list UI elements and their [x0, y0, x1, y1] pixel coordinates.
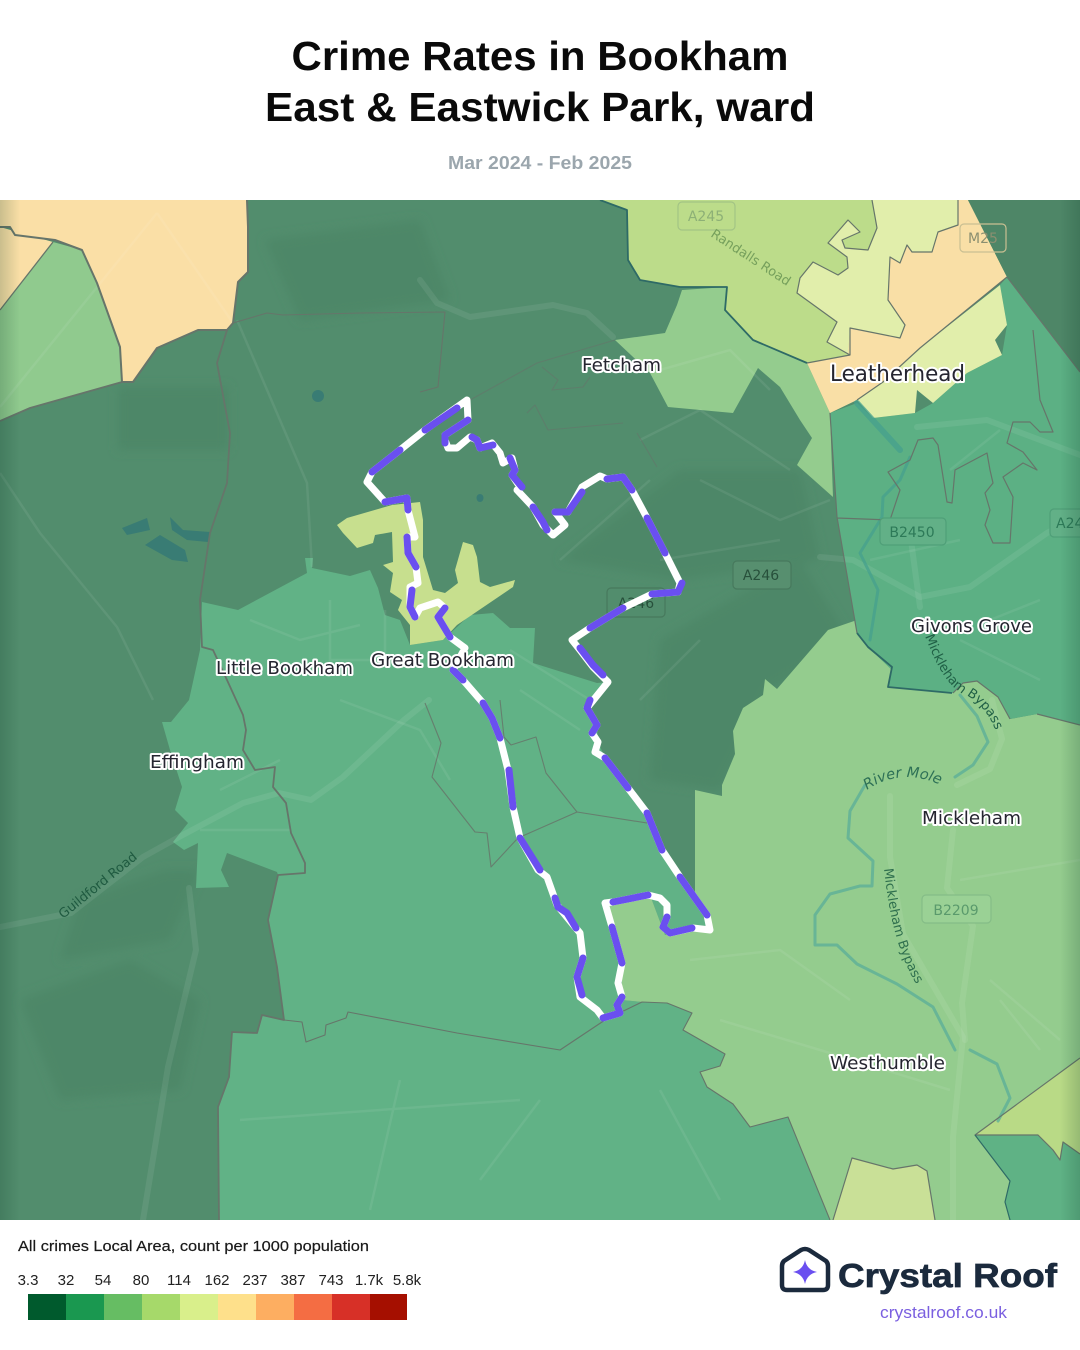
road label: Mickleham Bypass north: Mickleham Bypass [926, 634, 1002, 729]
place label: Leatherhead: Leatherhead [830, 362, 965, 387]
roads: faint network [0, 280, 1080, 1220]
darker field patches [20, 220, 850, 1100]
logo [782, 1249, 1058, 1322]
river label: River Mole [864, 766, 942, 790]
road label: M25 [960, 224, 1006, 252]
legend title: All crimes Local Area, count per 1000 population [18, 1238, 369, 1255]
region: Fetcham light green [615, 287, 833, 497]
region: Bookham mid green [162, 558, 830, 1220]
river [815, 403, 1010, 1121]
title: Crime Rates in Bookham [292, 33, 788, 79]
place label: Effingham: Effingham [150, 752, 244, 773]
title: East & Eastwick Park, ward [265, 84, 815, 130]
region: Leatherhead east green [830, 277, 1080, 725]
region: Randalls Road pale green [600, 200, 880, 363]
ward boundaries [0, 200, 1080, 1220]
road label: Guildford Road: Guildford Road [56, 850, 140, 922]
road label: A245: A245 [688, 209, 724, 225]
place label: Little Bookham: Little Bookham [216, 658, 353, 679]
region: Leatherhead east yellow-green [857, 285, 1007, 418]
legend scale values: 32 [58, 1272, 74, 1289]
road label: B2209: B2209 [933, 903, 979, 919]
road label: B2450: B2450 [889, 525, 935, 541]
legend scale values: 237 [242, 1272, 268, 1289]
road label: A246 second: A246 [618, 596, 654, 612]
legend scale values: 80 [133, 1272, 149, 1289]
region: Leatherhead pale yellow-green [797, 200, 958, 355]
region: north-west light green [0, 242, 122, 421]
region: south-east light green [606, 620, 1080, 1220]
road label: A246 second [607, 588, 665, 617]
road label: A245 [678, 202, 735, 230]
place label: Fetcham: Fetcham [582, 355, 661, 376]
ward outline: purple dashes [372, 408, 707, 1018]
legend scale values: 5.8k [393, 1272, 422, 1289]
logo wordmark: Crystal Roof [838, 1258, 1058, 1295]
road label: B2450 [880, 518, 946, 545]
legend scale values [18, 1272, 422, 1289]
region: north-west orange [0, 200, 248, 382]
region: Leatherhead orange [807, 200, 1007, 413]
subtitle: date range: Mar 2024 - Feb 2025 [448, 153, 632, 173]
legend colour bar [28, 1294, 407, 1320]
road label: Randalls Road: Randalls Road [708, 227, 793, 289]
logo url: crystalroof.co.uk [880, 1304, 1008, 1322]
title [265, 33, 815, 130]
road label: M25: M25 [968, 231, 998, 247]
legend scale values: 162 [204, 1272, 230, 1289]
road label: A246 [733, 561, 791, 589]
legend scale values: 1.7k [355, 1272, 384, 1289]
legend scale values: 387 [280, 1272, 306, 1289]
road label: A24 [1050, 509, 1080, 537]
place label: Givons Grove: Givons Grove [911, 616, 1032, 637]
region: south-east corner green [975, 1135, 1080, 1220]
legend scale values: 114 [167, 1272, 191, 1289]
choropleth map [0, 200, 1080, 1220]
road label: A246: A246 [743, 568, 779, 584]
legend scale values: 3.3 [18, 1272, 38, 1289]
icon: house with star [782, 1249, 828, 1290]
ward outline: white [367, 400, 710, 1018]
legend scale values: 743 [318, 1272, 344, 1289]
road label: Mickleham Bypass south: Mickleham Bypass [884, 868, 922, 983]
place label: Mickleham: Mickleham [922, 808, 1021, 829]
legend scale values: 54 [95, 1272, 111, 1289]
map edge shading [0, 200, 1080, 1220]
region: central pale green [337, 502, 515, 645]
region: south-east corner pale [975, 1058, 1080, 1160]
legend [18, 1238, 422, 1320]
region: south pale yellow [833, 1158, 935, 1220]
place label: Westhumble: Westhumble [830, 1053, 945, 1074]
lakes [122, 390, 484, 562]
region: M25 dark corner [968, 200, 1007, 277]
road label: B2209 [922, 895, 991, 923]
place label: Great Bookham: Great Bookham [371, 650, 514, 671]
